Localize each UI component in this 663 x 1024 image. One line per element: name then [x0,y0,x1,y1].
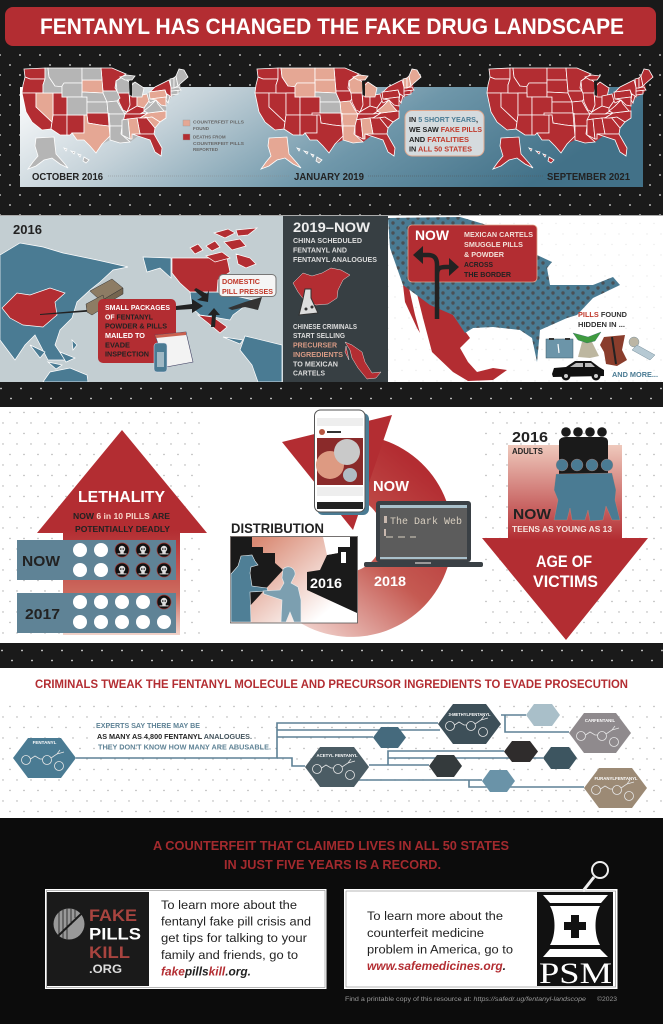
world map continents [0,228,282,382]
figures: adults [559,427,608,476]
logo: psm mortar and pestle: PSM [539,957,612,990]
panel: now mexican cartels [388,216,663,382]
callout: 5 short years: IN ALL 50 STATES [409,144,472,154]
text: pills found hidden: PILLS FOUND [578,310,628,319]
text: chinese criminals: CARTELS [293,370,325,378]
panel: white middle section [0,407,663,643]
map: September 2021 [487,68,653,169]
arrow: lethality [17,430,207,635]
text: learn more fake pills: get tips for talking to your [161,931,307,945]
callout: now red box: ACROSS [464,260,493,269]
icon: laptop [364,501,483,567]
timeline dates: JANUARY 2019 [294,172,364,183]
title banner: FENTANYL HAS CHANGED THE FAKE DRUG LANDSCAPE [40,14,624,39]
text: lethality: LETHALITY [78,489,165,506]
icon: corset [600,335,627,366]
callout: domestic pill presses: DOMESTIC [222,277,261,286]
map: usa dotted [388,217,620,362]
text: age labels: 2016 [512,429,548,446]
black strip with dots [0,643,663,668]
box: psm [344,862,618,990]
panel: fentanyl analogues [0,668,663,818]
footer: printable copy: Find a printable copy of this resource at: https://safedr.ug/fentanyl-landscope [345,996,586,1003]
callout: small packages: EVADE [105,340,130,350]
icon: mexico map [345,342,381,379]
icon: china map [293,268,350,305]
text: learn more psm: counterfeit medicine [367,926,484,940]
callout: 5 short years: AND FATALITIES [409,135,469,144]
logo: psm mortar and pestle [539,862,612,990]
text: experts say: EXPERTS SAY THERE MAY BE [96,723,200,730]
figure: dealer [231,555,268,622]
callout: domestic pill presses: PILL PRESSES [222,287,273,296]
logo: fake pills kill: KILL [89,943,130,962]
box: fake pills kill [45,889,326,989]
arrow: forked road [413,246,459,319]
text: learn more psm [367,909,513,973]
text: learn more psm: To learn more about the [367,909,503,923]
logo: fake pills kill [54,906,141,976]
heading: 2016: 2016 [13,222,42,237]
legend: DEATHS FROM [193,134,226,140]
text: age labels [512,429,613,534]
panel: 2019 to now [283,216,388,382]
callout: small packages: SMALL PACKAGES [105,303,170,312]
text: learn more fake pills: fakepillskill.org. [161,964,251,978]
legend: REPORTED [193,147,219,152]
heading: record [153,838,509,872]
callout: 5 short years [405,110,484,156]
icon: doll [629,337,655,360]
label: 2018: 2018 [374,573,406,589]
text: pills found hidden: HIDDEN IN ... [578,320,625,329]
text: chinese criminals: PRECURSER [293,342,337,350]
heading: 2019-now: 2019–NOW [293,219,371,235]
row: now pills [17,540,176,580]
hexagon: carfentanil [569,713,631,753]
callout: now red box [408,225,537,282]
hexagon: light [526,704,560,726]
text: china scheduled: FENTANYL AND [293,248,347,254]
icon: baggie of pills [154,332,193,372]
arrow: age of victims [482,427,648,640]
legend: FOUND [193,126,210,131]
icon: mail packages [86,279,123,315]
text: and more: AND MORE... [612,370,658,379]
text: learn more fake pills: family and friends, go to [161,948,298,962]
row: now pills: NOW [22,553,61,570]
panel: 2016 world map [0,216,663,382]
panel: bottom black section [0,818,663,1024]
heading: criminals tweak: CRIMINALS TWEAK THE FENTANYL MOLECULE AND PRECURSOR INGREDIENTS TO EVADE PROSECUTION [35,679,628,691]
callout: domestic pill presses [219,274,276,296]
map: mexico [403,285,507,381]
footer: printable copy: ©2023 [597,995,617,1003]
row: 2017 pills: 2017 [25,606,60,623]
hexagon: fentanyl: FENTANYL [33,740,57,745]
legend: COUNTERFEIT PILLS [193,120,244,124]
text: china scheduled: CHINA SCHEDULED [293,238,362,245]
arrow: China to US [40,288,262,327]
figures: teens [554,459,620,521]
callout: small packages: POWDER & PILLS [105,322,167,330]
scene: 2016 street deal: 2016 [310,575,342,591]
title banner [5,7,656,46]
callout: small packages: INSPECTION [105,350,149,358]
map: October 2016 [22,68,188,169]
callout: now red box: & POWDER [464,250,505,259]
hexagon: acetyl fentanyl [305,747,369,787]
text: learn more fake pills: To learn more about the [161,898,297,912]
heading: record: IN JUST FIVE YEARS IS A RECORD. [224,857,441,872]
callout: now red box: MEXICAN CARTELS [464,230,533,239]
callout: now red box: SMUGGLE PILLS [464,240,523,249]
hexagon: acetyl fentanyl: ACETYL FENTANYL [317,753,358,758]
timeline dates [32,172,630,183]
text: chinese criminals: TO MEXICAN [293,362,338,368]
black strip with dots [0,382,663,407]
text: experts say [96,723,271,752]
text: chinese criminals: CHINESE CRIMINALS [293,324,357,331]
logo: fake pills kill: FAKE [89,906,137,925]
legend: COUNTERFEIT PILLS [193,141,244,146]
text: chinese criminals [293,324,357,378]
chart: distribution circular arrow [230,410,483,637]
callout: 5 short years: WE SAW FAKE PILLS [409,125,482,134]
hexagon: methylfentanyl: 3-METHYLFENTANYL [448,712,491,717]
hexagon: dark 3 [429,755,462,777]
icon: car [552,361,604,380]
text: age labels: ADULTS [512,447,544,456]
background: top black [0,0,663,215]
text: learn more psm: problem in America, go to [367,942,513,956]
hexagon: dark 2 [543,747,577,769]
text: age labels: TEENS AS YOUNG AS 13 [512,525,613,534]
hexagon: light blue [482,770,515,792]
heading: distribution: DISTRIBUTION [231,520,324,536]
hexagon: fentanyl [13,738,76,778]
logo: fake pills kill: .ORG [89,962,122,976]
hexagon: dark 1 [504,741,538,762]
callout: small packages [98,299,176,363]
callout: now red box: THE BORDER [464,270,512,279]
callout: small packages: MAILED TO [105,331,145,340]
text: experts say: AS MANY AS 4,800 FENTANYL ANALOGUES. [97,734,252,741]
logo: fake pills kill: PILLS [89,924,141,944]
hexagon: unnamed blue [373,727,406,748]
label: now: NOW [373,478,410,495]
callout: 5 short years: IN 5 SHORT YEARS, [409,115,478,124]
text: chinese criminals: START SELLING [293,333,346,340]
timeline dates: OCTOBER 2016 [32,172,103,183]
callout: now red box: NOW [415,227,450,243]
callout: small packages: OF FENTANYL [105,312,153,322]
figure: buyer [263,567,301,622]
icon: toy figure [573,332,601,358]
text: age of victims: VICTIMS [533,572,598,591]
legend [183,120,244,152]
text: age of victims [533,552,598,591]
text: pills found hidden [578,310,628,329]
hexagon: furanylfentanyl: FURANYLFENTANYL [594,776,638,781]
scene: 2016 street deal [230,536,358,623]
row: 2017 pills [17,593,176,633]
text: learn more fake pills [161,898,311,978]
text: lethality: POTENTIALLY DEADLY [75,525,171,534]
background: top dots [0,50,663,215]
hexagon: carfentanil: CARFENTANIL [585,718,615,723]
text: china scheduled [293,238,377,264]
text: learn more fake pills: fentanyl fake pill crisis and [161,914,311,928]
text: china scheduled: FENTANYL ANALOGUES [293,257,377,264]
text: lethality [73,489,171,534]
map: January 2019 [255,68,421,169]
text: lethality: NOW 6 in 10 PILLS ARE [73,512,171,521]
timeline dates: SEPTEMBER 2021 [547,172,630,183]
heading: record: A COUNTERFEIT THAT CLAIMED LIVES IN ALL 50 STATES [153,838,509,853]
icon: battery [546,338,573,358]
hexagon: furanylfentanyl [584,768,647,808]
text: chinese criminals: INGREDIENTS [293,352,343,359]
panel: map timeline [20,68,653,187]
text: experts say: THEY DON'T KNOW HOW MANY ARE ABUSABLE. [98,744,271,752]
connector lines [76,715,584,787]
icon: phone [314,410,369,515]
text: age labels: NOW [513,506,552,523]
text: learn more psm: www.safemedicines.org. [367,959,506,973]
text: age of victims: AGE OF [536,552,592,571]
icon: flask [299,289,318,315]
icon: laptop: The Dark Web [390,516,462,528]
hexagon: methylfentanyl [438,704,501,744]
